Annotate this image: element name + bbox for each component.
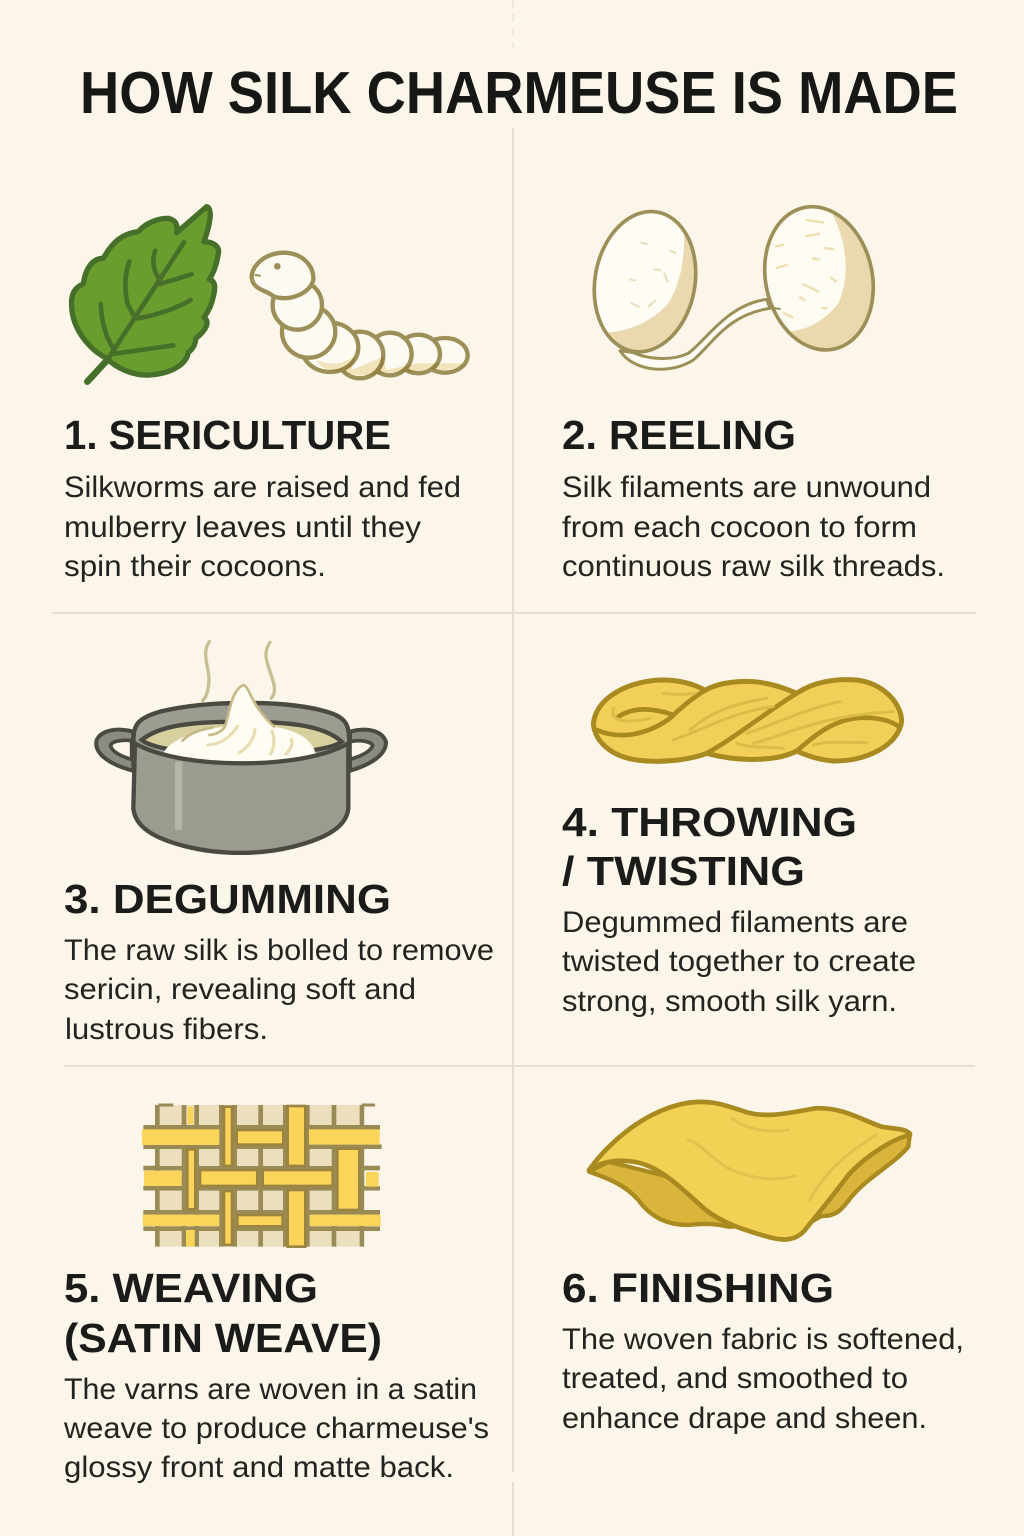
description: Silk filaments are unwound: [562, 471, 931, 504]
icon: silkworm: [252, 253, 468, 378]
icon: steaming pot: [96, 642, 386, 853]
description: The woven fabric is softened,: [562, 1323, 964, 1356]
description: [562, 906, 916, 1018]
description: lustrous fibers.: [65, 1013, 268, 1046]
panel: step 3 degumming: [64, 642, 494, 1046]
description: The raw silk is bolled to remove: [64, 934, 494, 967]
icon: satin weave swatch: [140, 1103, 383, 1250]
icon: twisted yarn: [593, 680, 902, 761]
description: [63, 1373, 489, 1484]
heading: 4. THROWING: [562, 799, 857, 845]
description: spin their cocoons.: [64, 550, 326, 583]
description: glossy front and matte back.: [64, 1451, 454, 1484]
description: Silkworms are raised and fed: [64, 471, 461, 504]
heading: 2. REELING: [562, 412, 796, 458]
description: [64, 471, 461, 583]
description: [64, 934, 494, 1046]
panel: step 4 throwing and twisting: [562, 680, 916, 1018]
title: HOW SILK CHARMEUSE IS MADE: [80, 60, 958, 126]
description: continuous raw silk threads.: [562, 550, 945, 583]
description: treated, and smoothed to: [562, 1362, 908, 1395]
heading: 5. WEAVING: [64, 1265, 318, 1311]
heading: 1. SERICULTURE: [64, 412, 391, 458]
description: from each cocoon to form: [562, 511, 917, 544]
heading: 3. DEGUMMING: [64, 876, 391, 922]
heading: 6. FINISHING: [562, 1265, 834, 1311]
description: sericin, revealing soft and: [64, 973, 416, 1006]
description: weave to produce charmeuse's: [63, 1412, 489, 1445]
icon: finished silk cloth: [589, 1102, 910, 1239]
description: mulberry leaves until they: [64, 511, 421, 544]
heading: [562, 799, 857, 894]
heading: (SATIN WEAVE): [64, 1315, 382, 1361]
panel: step 5 weaving: [63, 1103, 489, 1484]
description: strong, smooth silk yarn.: [562, 985, 897, 1018]
description: enhance drape and sheen.: [562, 1402, 927, 1435]
description: [562, 471, 945, 583]
heading: / TWISTING: [562, 848, 805, 894]
description: [562, 1323, 964, 1435]
icon: mulberry leaf: [72, 207, 219, 382]
description: twisted together to create: [562, 945, 916, 978]
panel: step 1 sericulture: [64, 207, 468, 583]
icon: cocoons with filament: [583, 196, 886, 369]
panel: step 6 finishing: [562, 1102, 964, 1435]
heading: [64, 1265, 382, 1361]
description: Degummed filaments are: [562, 906, 908, 939]
panel: step 2 reeling: [562, 196, 945, 583]
description: The varns are woven in a satin: [64, 1373, 477, 1406]
